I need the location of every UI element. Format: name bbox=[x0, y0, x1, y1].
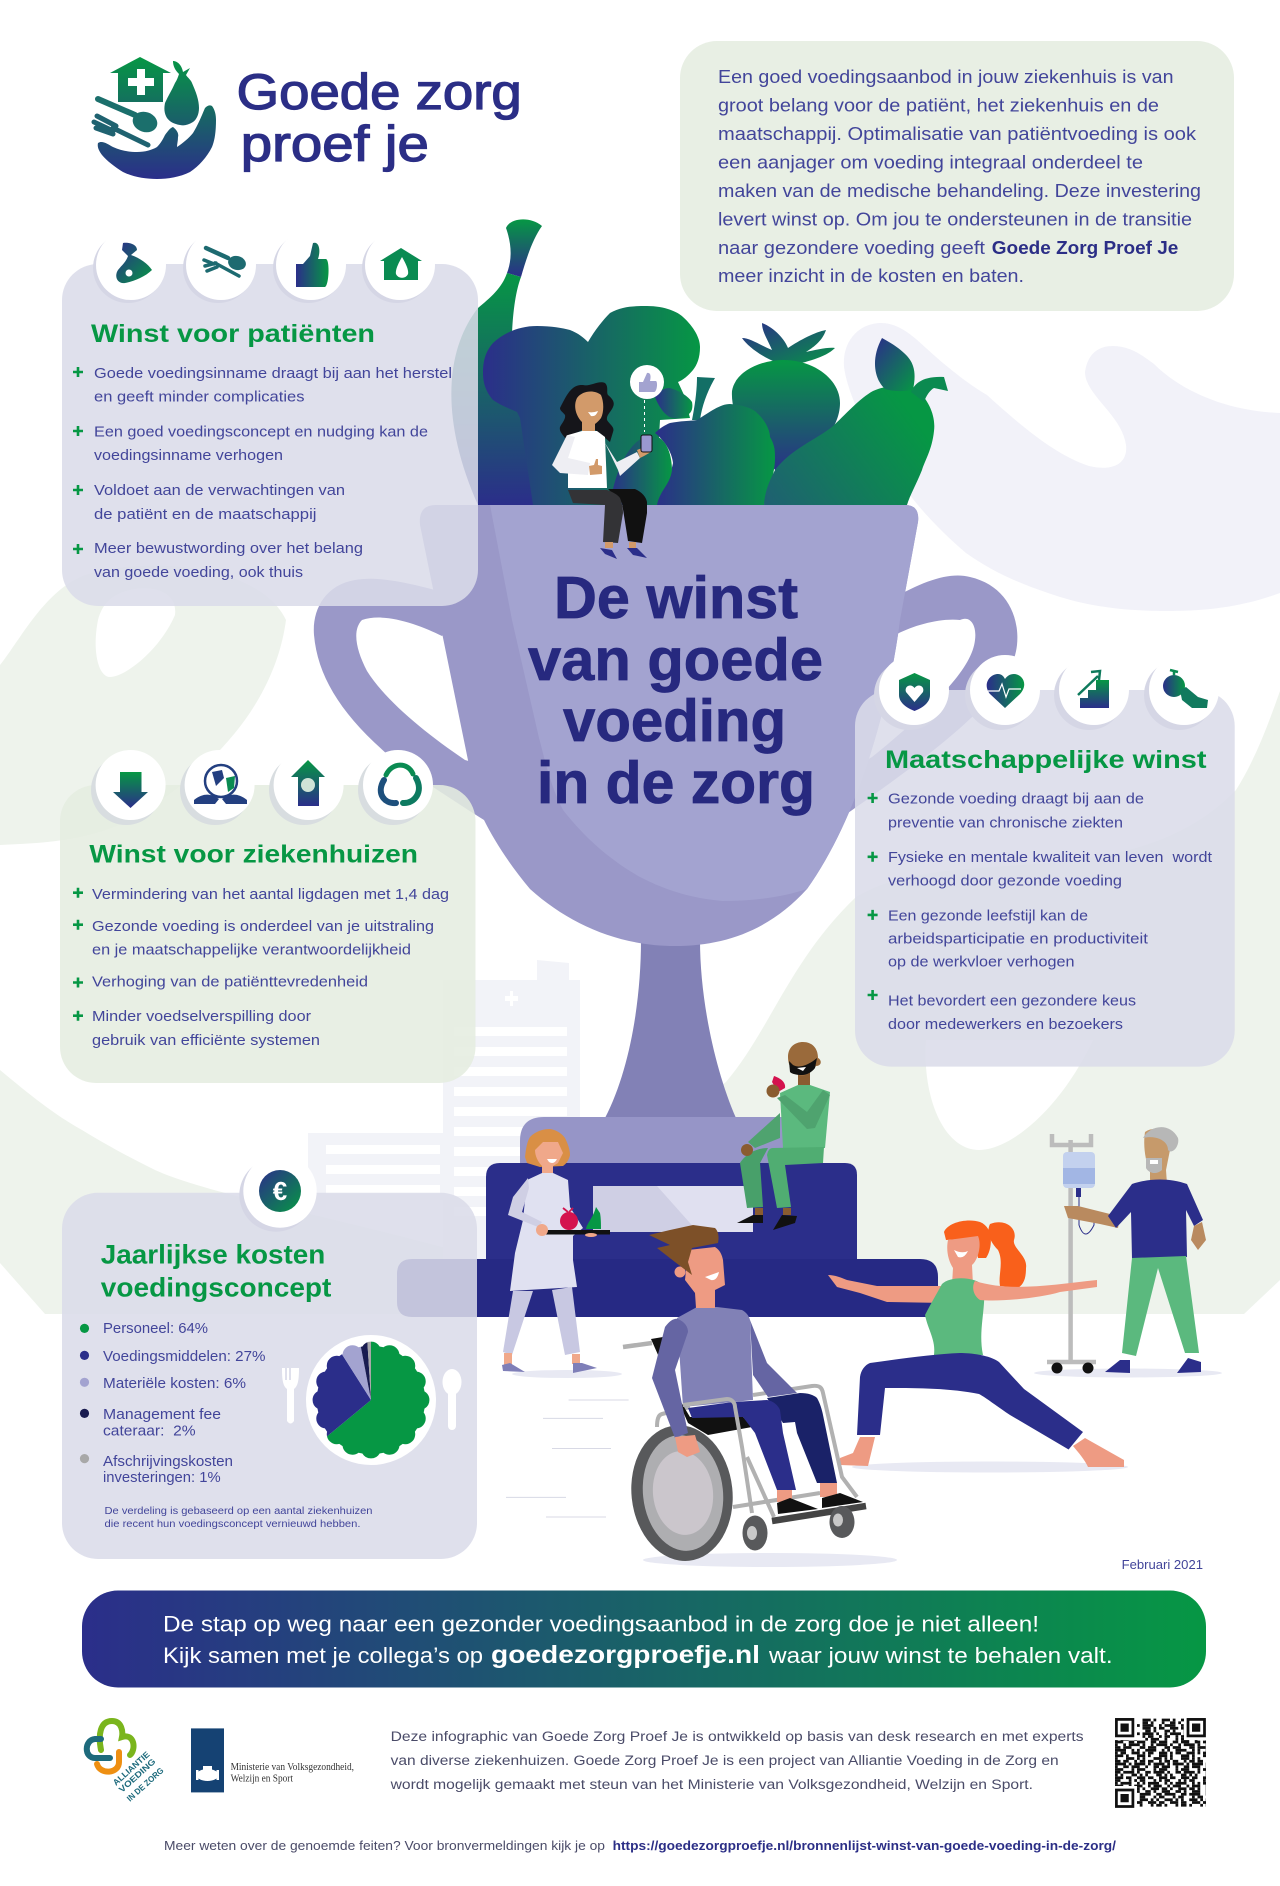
hand bbox=[766, 1084, 780, 1098]
panel: intro: Een goed voedingsaanbod in jouw ziekenhuis is van bbox=[718, 67, 1174, 87]
brand name: proef je bbox=[241, 116, 429, 172]
bullet list bbox=[868, 790, 1213, 1033]
shadow bbox=[1034, 1368, 1222, 1378]
dress bbox=[510, 1173, 583, 1291]
shoes bbox=[1105, 1358, 1201, 1373]
ear bbox=[674, 1266, 686, 1278]
icon: spoon and fork bbox=[204, 248, 248, 276]
logo: Alliantie Voeding in de Zorg bbox=[87, 1721, 166, 1803]
trophy right handle bbox=[845, 576, 1017, 815]
neck and head bbox=[685, 1247, 725, 1308]
feet bbox=[840, 1437, 1124, 1467]
fruit and vegetables bbox=[451, 219, 948, 505]
icon: recycling bbox=[381, 765, 419, 803]
legend: Management fee bbox=[103, 1407, 221, 1423]
ankles bbox=[504, 1353, 580, 1365]
small wheels bbox=[742, 1506, 854, 1550]
wheel bbox=[625, 1420, 739, 1566]
back leg bbox=[767, 1393, 837, 1483]
logo: Rijksoverheid: Ministerie van Volksgezondheid, bbox=[231, 1762, 354, 1773]
hair bbox=[560, 382, 614, 442]
date: Februari 2021 bbox=[1122, 1558, 1203, 1572]
bullet list: Goede voedingsinname draagt bij aan het herstel bbox=[94, 365, 452, 382]
smile bbox=[547, 1159, 557, 1163]
ankles bbox=[755, 1208, 791, 1215]
icon circles bbox=[874, 660, 1214, 730]
ponytail bbox=[988, 1222, 1026, 1288]
shoes bbox=[600, 548, 647, 559]
IV pole bbox=[1047, 1134, 1096, 1374]
ankles bbox=[605, 542, 636, 548]
rear arm bbox=[828, 1275, 945, 1303]
hair bbox=[649, 1225, 719, 1275]
arm rest bbox=[683, 1399, 752, 1513]
woman on trophy rim bbox=[552, 365, 664, 559]
footnote bbox=[104, 1506, 372, 1530]
legend: investeringen: 1% bbox=[103, 1470, 221, 1486]
trophy plaque bbox=[593, 1186, 753, 1232]
apple bbox=[655, 404, 775, 505]
trophy cup bbox=[420, 505, 918, 946]
bullet list: Fysieke en mentale kwaliteit van leven wordt bbox=[888, 849, 1213, 866]
panel: intro bbox=[680, 41, 1234, 311]
background: lilac blob bbox=[844, 323, 1280, 611]
legend: Materiële kosten: 6% bbox=[103, 1376, 246, 1392]
panel: winst voor patiënten bbox=[62, 230, 478, 606]
apple bbox=[772, 1076, 785, 1092]
arm right bbox=[605, 443, 640, 476]
call to action banner: De stap op weg naar een gezonder voedingsaanbod in de zorg doe je niet alleen! bbox=[163, 1612, 1039, 1636]
apple stem bbox=[692, 377, 715, 420]
push handle bbox=[623, 1343, 652, 1347]
hand bbox=[675, 1435, 700, 1457]
head bbox=[788, 1042, 821, 1076]
shoes bbox=[777, 1493, 863, 1514]
bullet list: de patiënt en de maatschappij bbox=[94, 506, 316, 523]
bullet list: op de werkvloer verhogen bbox=[888, 954, 1074, 970]
person: yoga woman bbox=[828, 1220, 1128, 1472]
front leg bbox=[688, 1400, 796, 1490]
top bbox=[925, 1278, 984, 1355]
icon: shield with heart bbox=[899, 673, 930, 711]
smile bbox=[588, 411, 598, 416]
hair bbox=[944, 1220, 991, 1258]
arm bbox=[1064, 1206, 1120, 1228]
panel: intro: meer inzicht in de kosten en baten. bbox=[718, 266, 1024, 286]
icon: arrow down bbox=[113, 772, 148, 808]
hand right bbox=[1191, 1222, 1206, 1250]
sources line: Meer weten over de genoemde feiten? Voor bronvermeldingen kijk je op bbox=[164, 1839, 605, 1853]
knee hand bbox=[741, 1144, 753, 1156]
logo: Alliantie Voeding in de Zorg: IN DE ZORG bbox=[125, 1765, 166, 1803]
broccoli bbox=[483, 306, 700, 505]
hospital silhouette bbox=[308, 960, 580, 1270]
heading: Winst voor ziekenhuizen bbox=[89, 841, 418, 869]
hand bbox=[536, 1224, 548, 1236]
pear stem bbox=[911, 377, 948, 402]
panel: intro: levert winst op. Om jou te ondersteunen in de transitie bbox=[718, 210, 1192, 230]
rear arm bbox=[750, 1320, 797, 1397]
hair bbox=[525, 1129, 570, 1167]
title: voeding bbox=[563, 688, 786, 754]
footnote: De verdeling is gebaseerd op een aantal ziekenhuizen bbox=[104, 1506, 372, 1517]
footer text bbox=[389, 1729, 1084, 1792]
bullet list: Een gezonde leefstijl kan de bbox=[888, 908, 1088, 924]
pear bbox=[764, 386, 934, 505]
bullet list: Gezonde voeding is onderdeel van je uitstraling bbox=[92, 918, 434, 935]
shoes bbox=[737, 1215, 797, 1230]
bullet list bbox=[73, 886, 449, 1049]
neck and face bbox=[575, 392, 603, 433]
QR code bbox=[1115, 1718, 1206, 1808]
sources line: https://goedezorgproefje.nl/bronnenlijst-winst-van-goede-voeding-in-de-zorg/ bbox=[613, 1839, 1117, 1853]
front leg bbox=[568, 490, 623, 543]
panel: maatschappelijke winst bbox=[855, 655, 1235, 1067]
panel: intro: een aanjager om voeding integraal onderdeel te bbox=[718, 152, 1143, 172]
title: van goede bbox=[528, 627, 823, 693]
torso bbox=[677, 1307, 753, 1407]
logo bbox=[94, 57, 216, 179]
trophy base tier 1 bbox=[520, 1117, 785, 1170]
bullet list: Meer bewustwording over het belang bbox=[94, 540, 363, 557]
brand name bbox=[237, 64, 522, 172]
footer text: van diverse ziekenhuizen. Goede Zorg Proef Je is een project van Alliantie Voeding in de Zorg en bbox=[391, 1753, 1059, 1768]
panel: intro: naar gezondere voeding geeft bbox=[718, 238, 985, 258]
shirt bbox=[1108, 1180, 1203, 1259]
bullet list: preventie van chronische ziekten bbox=[888, 814, 1123, 832]
torso bbox=[568, 431, 607, 488]
logo: Alliantie Voeding in de Zorg: ALLIANTIE bbox=[111, 1749, 152, 1787]
head bbox=[1143, 1127, 1178, 1184]
icon: arrow up with smiley bbox=[291, 760, 325, 806]
panel: intro: maatschappij. Optimalisatie van patiëntvoeding is ook bbox=[718, 124, 1197, 144]
icon: fork bbox=[282, 1368, 299, 1424]
shadow bbox=[643, 1553, 897, 1567]
icon: euro bbox=[239, 1154, 317, 1232]
bullet list: Voldoet aan de verwachtingen van bbox=[94, 482, 345, 499]
shadow bbox=[512, 1370, 622, 1378]
call to action banner bbox=[82, 1590, 1206, 1688]
bullet list: Het bevordert een gezondere keus bbox=[888, 992, 1136, 1010]
panel: intro: Goede Zorg Proef Je bbox=[992, 238, 1178, 258]
logo: Rijksoverheid: Welzijn en Sport bbox=[231, 1774, 293, 1784]
bullet list: arbeidsparticipatie en productiviteit bbox=[888, 930, 1149, 948]
bullet list: en geeft minder complicaties bbox=[94, 388, 304, 406]
icon: house with pear bbox=[380, 248, 422, 280]
front arm bbox=[973, 1280, 1097, 1301]
brand name: Goede zorg bbox=[237, 64, 522, 120]
trousers bbox=[857, 1353, 1083, 1450]
strawberry leaves bbox=[742, 323, 835, 366]
left arm bbox=[508, 1178, 542, 1227]
background: green band bbox=[0, 691, 1280, 1314]
trousers bbox=[503, 1287, 580, 1355]
heading bbox=[101, 1240, 331, 1302]
neck bbox=[798, 1070, 810, 1088]
call to action banner: goedezorgproefje.nl bbox=[491, 1641, 760, 1669]
footer text: wordt mogelijk gemaakt met steun van het Ministerie van Volksgezondheid, Welzijn en Sport. bbox=[389, 1777, 1033, 1792]
bullet list: verhoogd door gezonde voeding bbox=[888, 872, 1122, 890]
sources line bbox=[164, 1839, 1117, 1853]
icon: apple and hand bbox=[1163, 670, 1208, 708]
rear arm bbox=[748, 1113, 780, 1148]
pear leaf bbox=[875, 338, 915, 391]
shoes bbox=[502, 1363, 597, 1373]
back leg bbox=[608, 489, 647, 543]
icon: euro: € bbox=[273, 1176, 287, 1206]
icon circles bbox=[91, 755, 428, 825]
chair back and seat bbox=[651, 1337, 752, 1435]
title: in de zorg bbox=[537, 750, 815, 816]
face bbox=[947, 1236, 980, 1285]
back leg bbox=[740, 1148, 768, 1208]
cup dark body bbox=[420, 505, 918, 946]
bullet list: Verhoging van de patiënttevredenheid bbox=[92, 974, 368, 990]
torso bbox=[780, 1085, 830, 1148]
heading: voedingsconcept bbox=[101, 1272, 331, 1302]
icon: flexed arm bbox=[116, 243, 152, 283]
house bbox=[110, 57, 171, 102]
call to action banner: waar jouw winst te behalen valt. bbox=[768, 1643, 1113, 1668]
vegetable neck bbox=[506, 219, 542, 277]
pear bbox=[164, 61, 199, 125]
arm left bbox=[552, 435, 590, 475]
smile bbox=[705, 1272, 719, 1280]
bullet list: door medewerkers en bezoekers bbox=[888, 1016, 1123, 1033]
front leg bbox=[767, 1147, 824, 1208]
panel: intro: maken van de medische behandeling. Deze investering bbox=[718, 181, 1201, 201]
shadow bbox=[852, 1462, 1128, 1472]
person: nurse with tray bbox=[502, 1129, 622, 1378]
rear frame bbox=[657, 1386, 857, 1517]
hand and phone bbox=[637, 435, 652, 458]
legend: cateraar: 2% bbox=[103, 1424, 196, 1440]
tray bbox=[546, 1207, 610, 1237]
heading: Maatschappelijke winst bbox=[885, 746, 1207, 774]
trophy base tier 3 bbox=[397, 1259, 938, 1317]
bullet list: voedingsinname verhogen bbox=[94, 447, 283, 464]
hand bbox=[98, 105, 216, 179]
logo: Alliantie Voeding in de Zorg: VOEDING bbox=[117, 1756, 158, 1794]
icon circles bbox=[93, 233, 432, 303]
footer text: Deze infographic van Goede Zorg Proef Je is ontwikkeld op basis van desk research en met experts bbox=[391, 1729, 1084, 1744]
strawberry bbox=[732, 360, 840, 475]
icon: thumb up bbox=[296, 243, 329, 287]
background: white gap in green band bbox=[926, 1040, 1093, 1150]
bullet list: Minder voedselverspilling door bbox=[92, 1008, 311, 1025]
front arm bbox=[652, 1319, 688, 1438]
logo: Rijksoverheid bbox=[191, 1728, 354, 1792]
person: patient with IV drip bbox=[1034, 1127, 1222, 1378]
thumb hand bbox=[589, 459, 602, 475]
legend: Afschrijvingskosten bbox=[103, 1454, 233, 1470]
footnote: die recent hun voedingsconcept vernieuwd hebben. bbox=[104, 1519, 360, 1530]
foot plate bbox=[772, 1506, 866, 1521]
fork bbox=[94, 116, 148, 145]
legend: Personeel: 64% bbox=[103, 1321, 208, 1337]
bullet list: Vermindering van het aantal ligdagen met 1,4 dag bbox=[92, 886, 449, 903]
small leaf bbox=[655, 388, 692, 418]
icon: spoon bbox=[442, 1369, 462, 1430]
vegetable body bbox=[451, 273, 540, 505]
trousers bbox=[1122, 1256, 1199, 1356]
heading: Winst voor patiënten bbox=[91, 320, 375, 348]
trophy stem bbox=[605, 940, 736, 1118]
beard bbox=[789, 1058, 817, 1075]
legend bbox=[80, 1321, 266, 1486]
apple lobe bbox=[610, 435, 672, 505]
spoon bbox=[98, 99, 160, 135]
title: De winst bbox=[554, 565, 798, 631]
icon: heart with pulse bbox=[987, 674, 1024, 708]
trophy left handle bbox=[314, 579, 500, 820]
sleeve bbox=[777, 1090, 830, 1129]
panel: jaarlijkse kosten bbox=[62, 1154, 477, 1559]
bullet list: en je maatschappelijke verantwoordelijkheid bbox=[92, 942, 411, 958]
bullet list: van goede voeding, ook thuis bbox=[94, 564, 303, 581]
panel: intro: groot belang voor de patiënt, het ziekenhuis en de bbox=[718, 96, 1159, 116]
speed lines bbox=[506, 1400, 629, 1517]
bullet list: Gezonde voeding draagt bij aan de bbox=[888, 790, 1144, 808]
trophy bbox=[314, 576, 1017, 1317]
legend: Voedingsmiddelen: 27% bbox=[103, 1349, 266, 1365]
icon: stairs with arrow bbox=[1078, 671, 1109, 708]
bullet list bbox=[73, 365, 452, 581]
like bubble bbox=[630, 365, 664, 432]
face bbox=[535, 1142, 563, 1174]
call to action banner: Kijk samen met je collega’s op bbox=[163, 1643, 483, 1668]
background: green blob left bbox=[0, 565, 286, 845]
title bbox=[528, 565, 823, 816]
heading: Jaarlijkse kosten bbox=[101, 1240, 325, 1270]
icon: globe in hands bbox=[194, 765, 247, 804]
bullet list: Een goed voedingsconcept en nudging kan de bbox=[94, 424, 428, 440]
panel: winst voor ziekenhuizen bbox=[60, 750, 476, 1083]
person: man seated with apple bbox=[737, 1042, 830, 1230]
bullet list: gebruik van efficiënte systemen bbox=[92, 1032, 320, 1049]
ankles bbox=[777, 1483, 837, 1502]
pie chart on plate bbox=[303, 1332, 439, 1468]
trophy base tier 2 bbox=[486, 1163, 857, 1265]
cup light area bbox=[490, 505, 918, 901]
person: man in wheelchair bbox=[623, 1225, 897, 1567]
